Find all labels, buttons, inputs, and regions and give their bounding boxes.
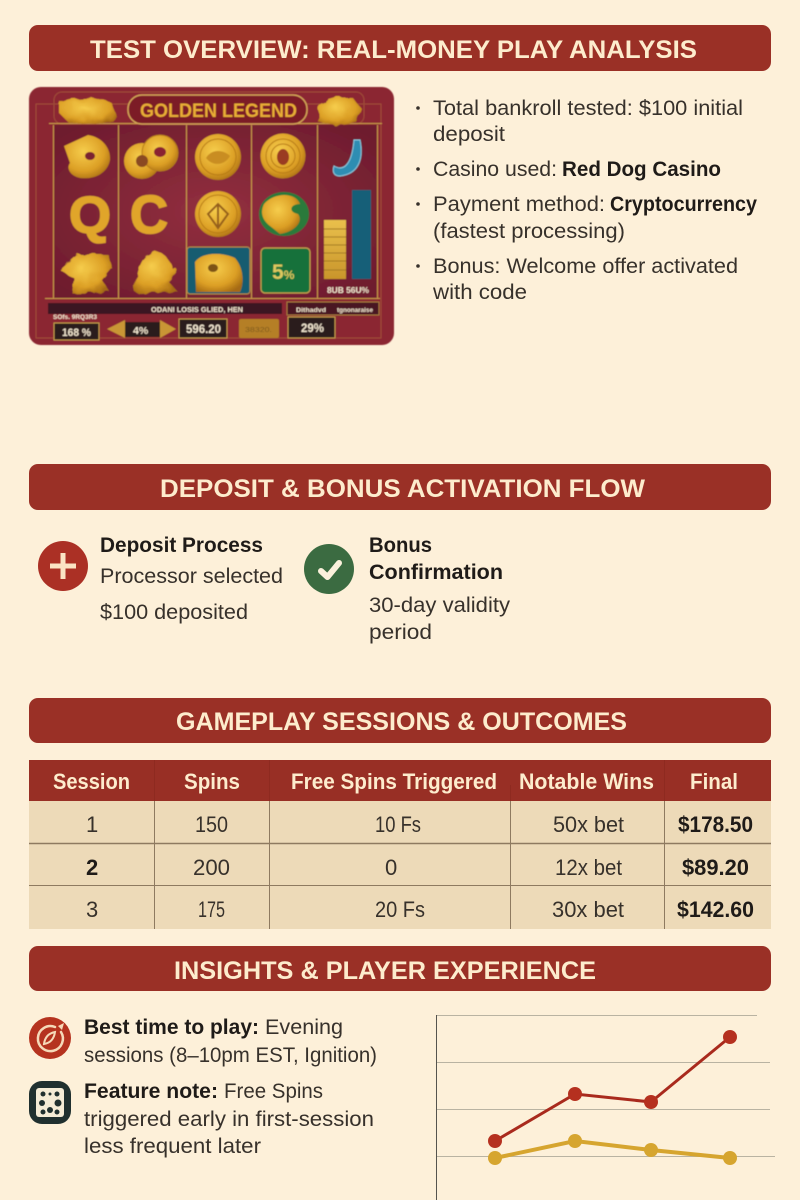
line chart (436, 1015, 775, 1200)
insight: feature note: triggered early in first-session (84, 1108, 374, 1131)
icon: clock target (29, 1017, 71, 1059)
table row: session 2 (86, 855, 749, 880)
game logo: GOLDEN LEGEND (140, 100, 297, 122)
game control bar: tgnonaraise (337, 307, 373, 314)
test details bullet list: Payment method: (433, 193, 605, 216)
table row: session 1 (86, 812, 753, 837)
table header row: Final (690, 769, 738, 794)
reel symbols: 5% (272, 261, 295, 284)
game control bar: 596.20 (186, 324, 221, 336)
slot game screenshot (29, 87, 394, 345)
icon: dice (29, 1081, 71, 1124)
insight: best time to play: Best time to play: (84, 1016, 259, 1039)
table row: session 3: $142.60 (677, 897, 754, 922)
reel symbols: Q (69, 187, 111, 245)
game control bar: 4% (133, 325, 149, 337)
heading: gameplay sessions: GAMEPLAY SESSIONS & OUTCOMES (176, 708, 627, 736)
table row: session 3 (86, 897, 754, 922)
side meters (324, 190, 371, 295)
insight: feature note: Free Spins (224, 1080, 323, 1103)
heading: deposit and bonus flow (29, 464, 771, 510)
table row: session 3: 175 (198, 897, 225, 922)
table header row: Session (53, 769, 130, 794)
icon: check mark (304, 544, 354, 594)
table header row (29, 760, 771, 801)
test details bullet list: Casino used: (433, 158, 557, 181)
side meters: 8UB 56U% (327, 286, 369, 295)
icon: plus (38, 541, 88, 591)
table row: session 2: 12x bet (555, 855, 622, 880)
step: deposit process: Deposit Process (100, 534, 263, 557)
red data series (488, 1030, 737, 1148)
step: deposit process: $100 deposited (100, 601, 248, 624)
table: session outcomes (29, 760, 771, 929)
insight: best time to play: sessions (8–10pm EST, Ignition) (84, 1044, 377, 1067)
game logo (128, 95, 307, 124)
gold data series (488, 1134, 737, 1165)
step: bonus confirmation: 30-day validity (369, 594, 511, 617)
table row: session 3: 30x bet (552, 897, 624, 922)
step: bonus confirmation: period (369, 621, 432, 644)
insight: feature note: less frequent later (84, 1135, 261, 1158)
table row: session 1: $178.50 (678, 812, 753, 837)
table row: session 2: 200 (193, 855, 230, 880)
table row: session 1: 50x bet (553, 812, 624, 837)
step: bonus confirmation: Confirmation (369, 561, 503, 584)
insight: best time to play (29, 1016, 377, 1067)
table row: session 1: 10 Fs (375, 812, 421, 837)
heading: insights and player experience: INSIGHTS & PLAYER EXPERIENCE (174, 957, 596, 985)
game control bar: SOfs. 9RQ3R3 (53, 314, 97, 321)
table row: session 2: 2 (86, 855, 98, 880)
table row: session 2: $89.20 (682, 855, 749, 880)
table row: session 3: 20 Fs (375, 897, 425, 922)
insight: best time to play: Evening (265, 1016, 343, 1039)
insight: feature note (29, 1080, 374, 1158)
heading: deposit and bonus flow: DEPOSIT & BONUS ACTIVATION FLOW (160, 475, 645, 503)
table header row: Spins (184, 769, 240, 794)
game control bar: Dithadvd (296, 307, 326, 314)
game control bar: 29% (301, 323, 324, 335)
test details bullet list: Red Dog Casino (562, 158, 721, 181)
game control bar: 38320. (245, 327, 272, 334)
test details bullet list (416, 97, 757, 304)
game control bar: 168 % (62, 327, 91, 339)
step: deposit process (38, 534, 283, 624)
insight: feature note: Feature note: (84, 1080, 218, 1103)
test details bullet list: with code (432, 281, 527, 304)
test details bullet list: (fastest processing) (433, 220, 625, 243)
table row: session 1: 1 (86, 812, 98, 837)
test details bullet list: Cryptocurrency (610, 193, 757, 216)
top gold ornaments (60, 97, 361, 125)
reel symbols (60, 134, 361, 294)
step: bonus confirmation (304, 534, 511, 644)
table row: session 3: 3 (86, 897, 98, 922)
step: deposit process: Processor selected (100, 565, 283, 588)
table row: session 1: 150 (195, 812, 228, 837)
test details bullet list: Bonus: Welcome offer activated (433, 255, 738, 278)
game control bar: ODANI LOSIS GLIED, HEN (151, 305, 243, 314)
test details bullet list: deposit (433, 123, 505, 146)
step: bonus confirmation: Bonus (369, 534, 432, 557)
table header row: Free Spins Triggered (291, 769, 497, 794)
heading: test overview: TEST OVERVIEW: REAL-MONEY PLAY ANALYSIS (90, 36, 697, 64)
heading: test overview (29, 25, 771, 71)
table row: session 2: 0 (385, 855, 397, 880)
heading: gameplay sessions (29, 698, 771, 743)
test details bullet list: Total bankroll tested: $100 initial (433, 97, 743, 120)
table header row: Notable Wins (519, 769, 654, 794)
heading: insights and player experience (29, 946, 771, 991)
game control bar (48, 302, 379, 340)
reel symbols: C (130, 185, 168, 245)
